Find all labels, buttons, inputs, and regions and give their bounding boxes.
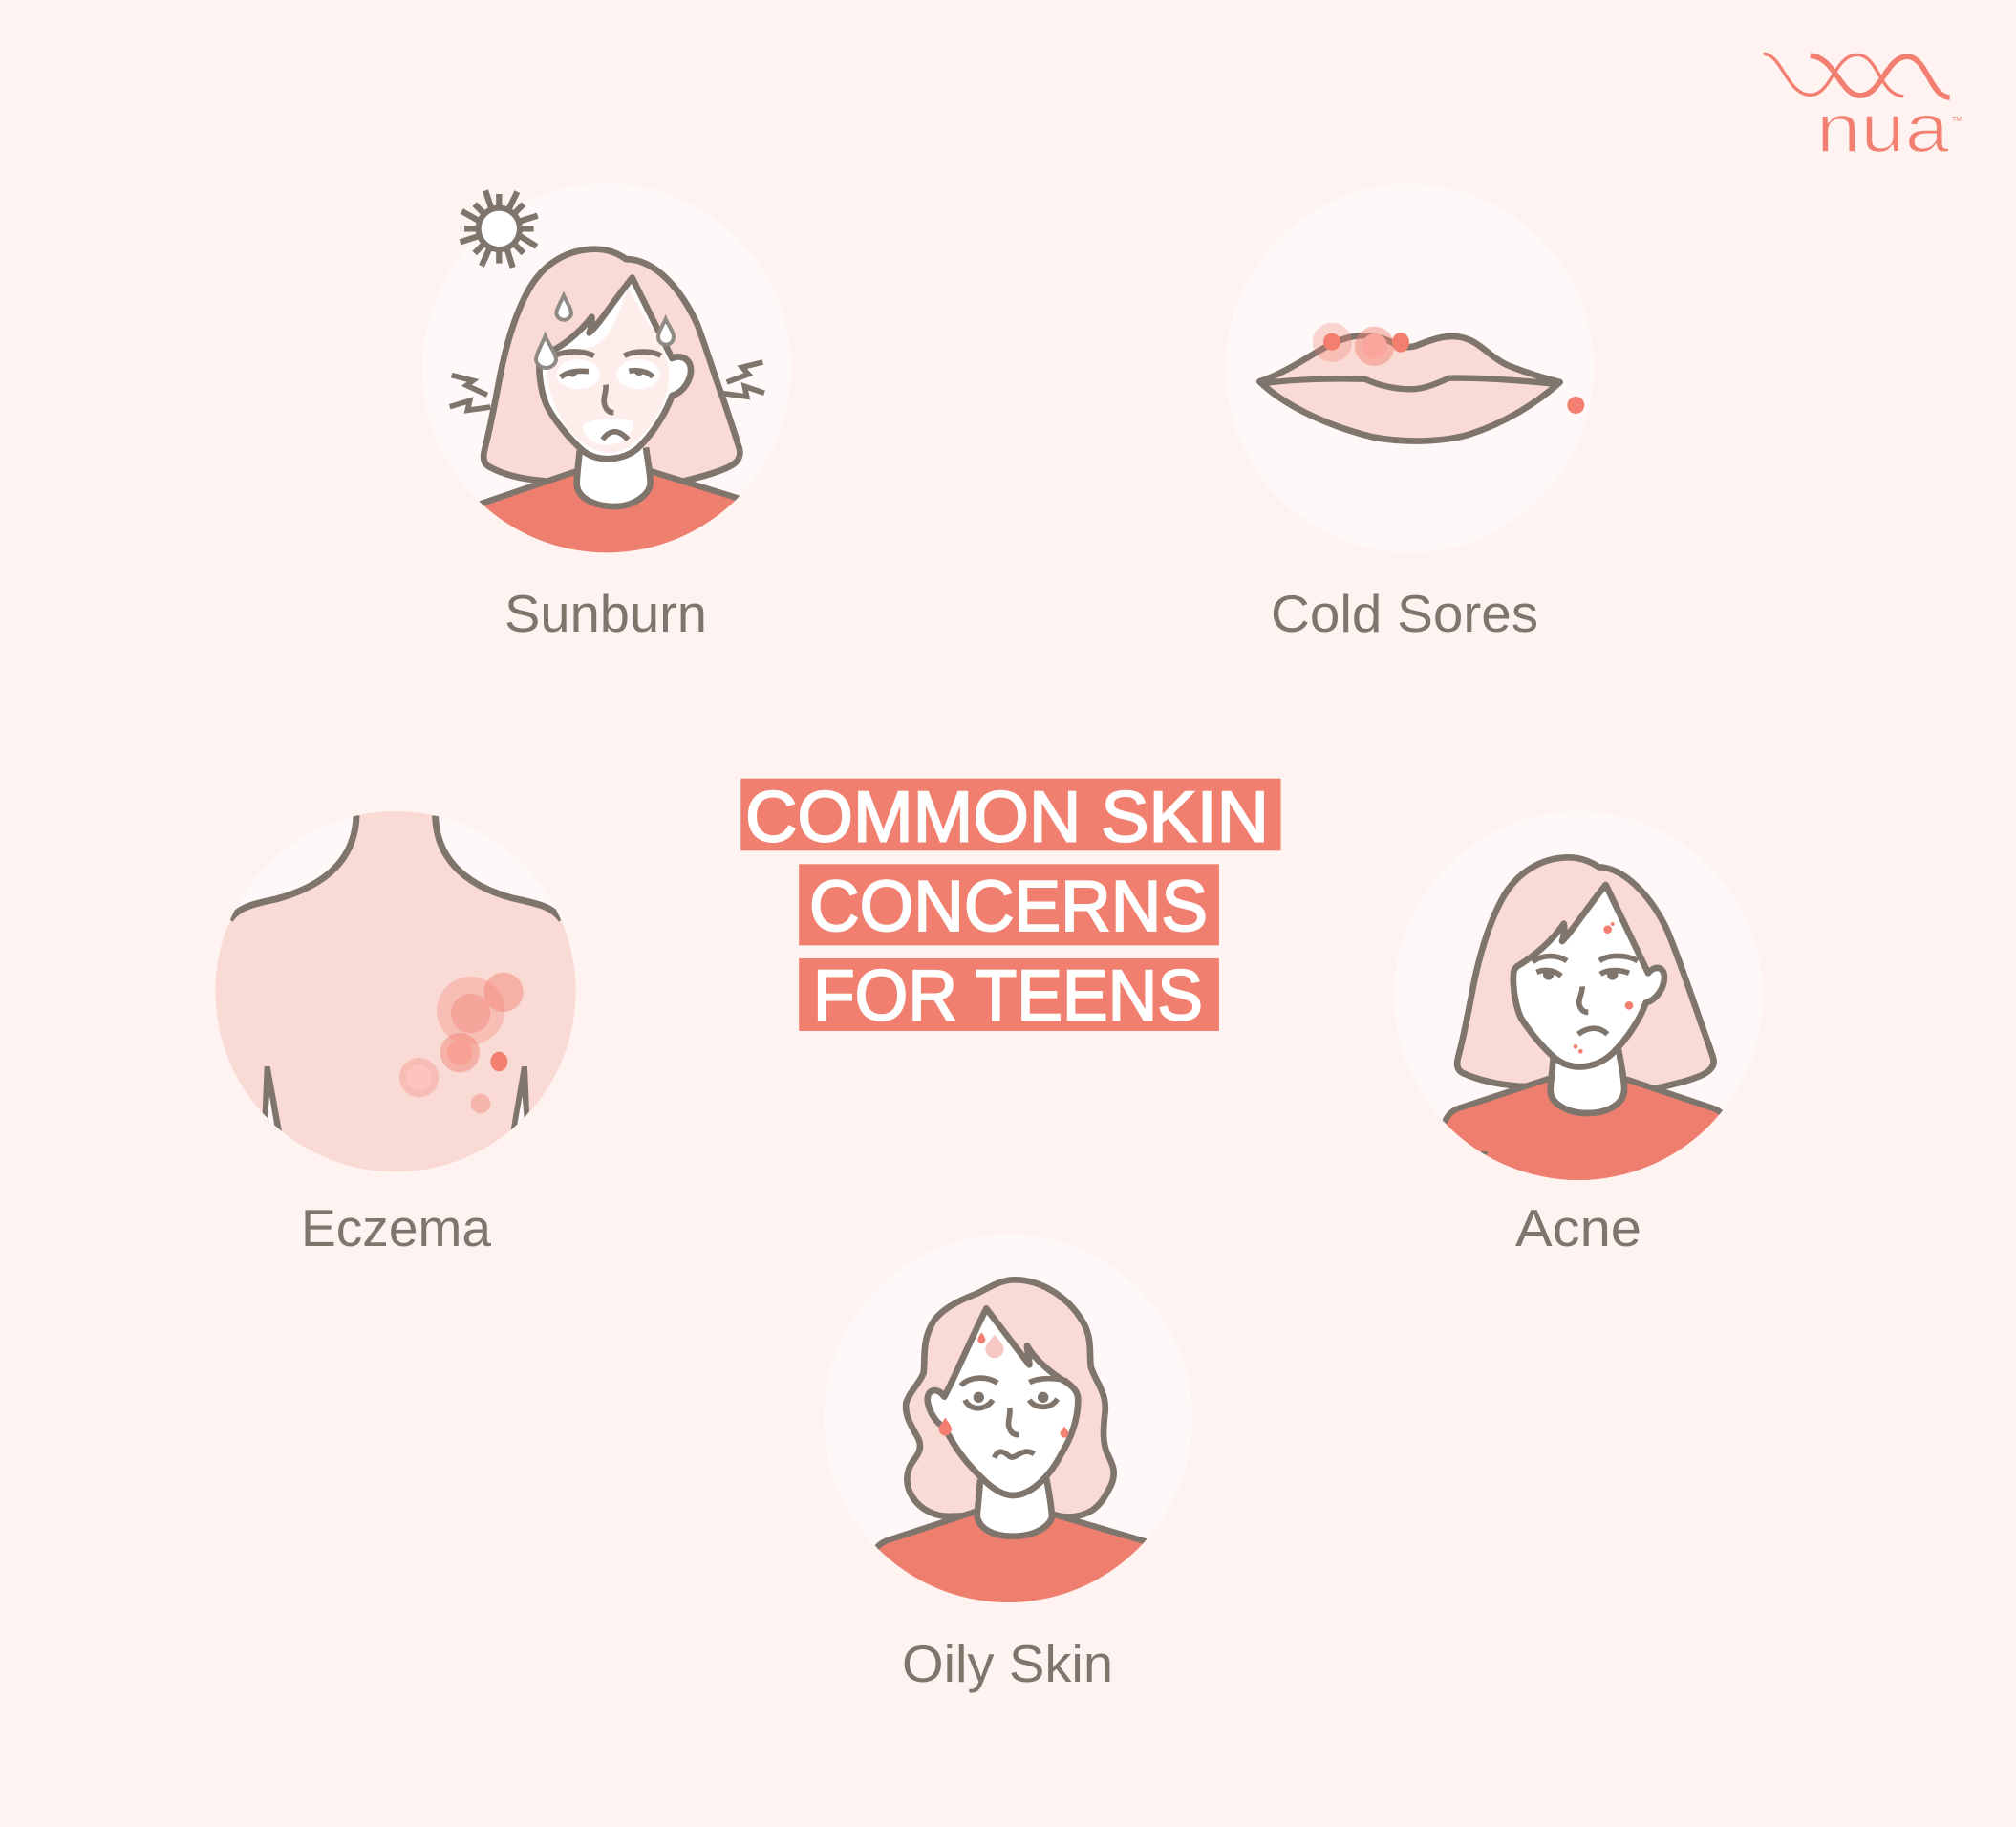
face <box>928 1308 1078 1495</box>
sores <box>1313 323 1584 414</box>
under-eye patches <box>556 359 660 445</box>
facial features <box>1533 956 1638 1034</box>
panel: cold sores <box>1226 184 1594 552</box>
hair <box>906 1279 1114 1516</box>
shirt <box>479 468 740 552</box>
hair <box>483 249 740 482</box>
logo: nua <box>1764 54 1962 167</box>
lips <box>1259 335 1560 441</box>
heat zigzags <box>450 362 764 410</box>
label: cold sores: Cold Sores <box>1271 584 1538 643</box>
label: eczema: Eczema <box>301 1198 491 1257</box>
neck <box>977 1478 1052 1537</box>
title line 1: COMMON SKIN <box>745 776 1269 856</box>
label: oily skin: Oily Skin <box>902 1634 1113 1693</box>
sunburn blush <box>547 289 669 453</box>
title <box>740 776 1280 1036</box>
circle background <box>215 811 576 1171</box>
title line 2: CONCERNS <box>809 866 1208 946</box>
panel: sunburn <box>449 189 765 552</box>
shirt <box>1443 1076 1723 1180</box>
logo: nua: nua <box>1816 92 1950 167</box>
oil drops <box>939 1332 1068 1438</box>
label: acne: Acne <box>1515 1198 1641 1257</box>
panel: oily skin <box>875 1277 1147 1602</box>
sweat drops <box>536 295 674 368</box>
face <box>1513 885 1664 1066</box>
facial features <box>556 352 661 440</box>
neck <box>577 447 651 506</box>
facial features <box>961 1378 1067 1458</box>
circle background <box>1394 811 1763 1180</box>
icon: sun <box>461 190 538 268</box>
neck <box>1551 1049 1624 1113</box>
acne spots <box>1574 922 1633 1054</box>
rash spots <box>399 973 524 1113</box>
shirt <box>875 1508 1147 1602</box>
panel: acne <box>1443 854 1723 1180</box>
circle background <box>1226 184 1594 552</box>
body <box>215 811 576 1171</box>
circle background <box>422 183 791 552</box>
panel: eczema <box>216 811 575 1171</box>
circle background <box>824 1235 1192 1602</box>
label: sunburn: Sunburn <box>504 584 707 643</box>
hair <box>1457 857 1714 1088</box>
title line 3: FOR TEENS <box>813 956 1203 1036</box>
logo: nua: TM <box>1952 117 1962 123</box>
face <box>539 278 691 459</box>
